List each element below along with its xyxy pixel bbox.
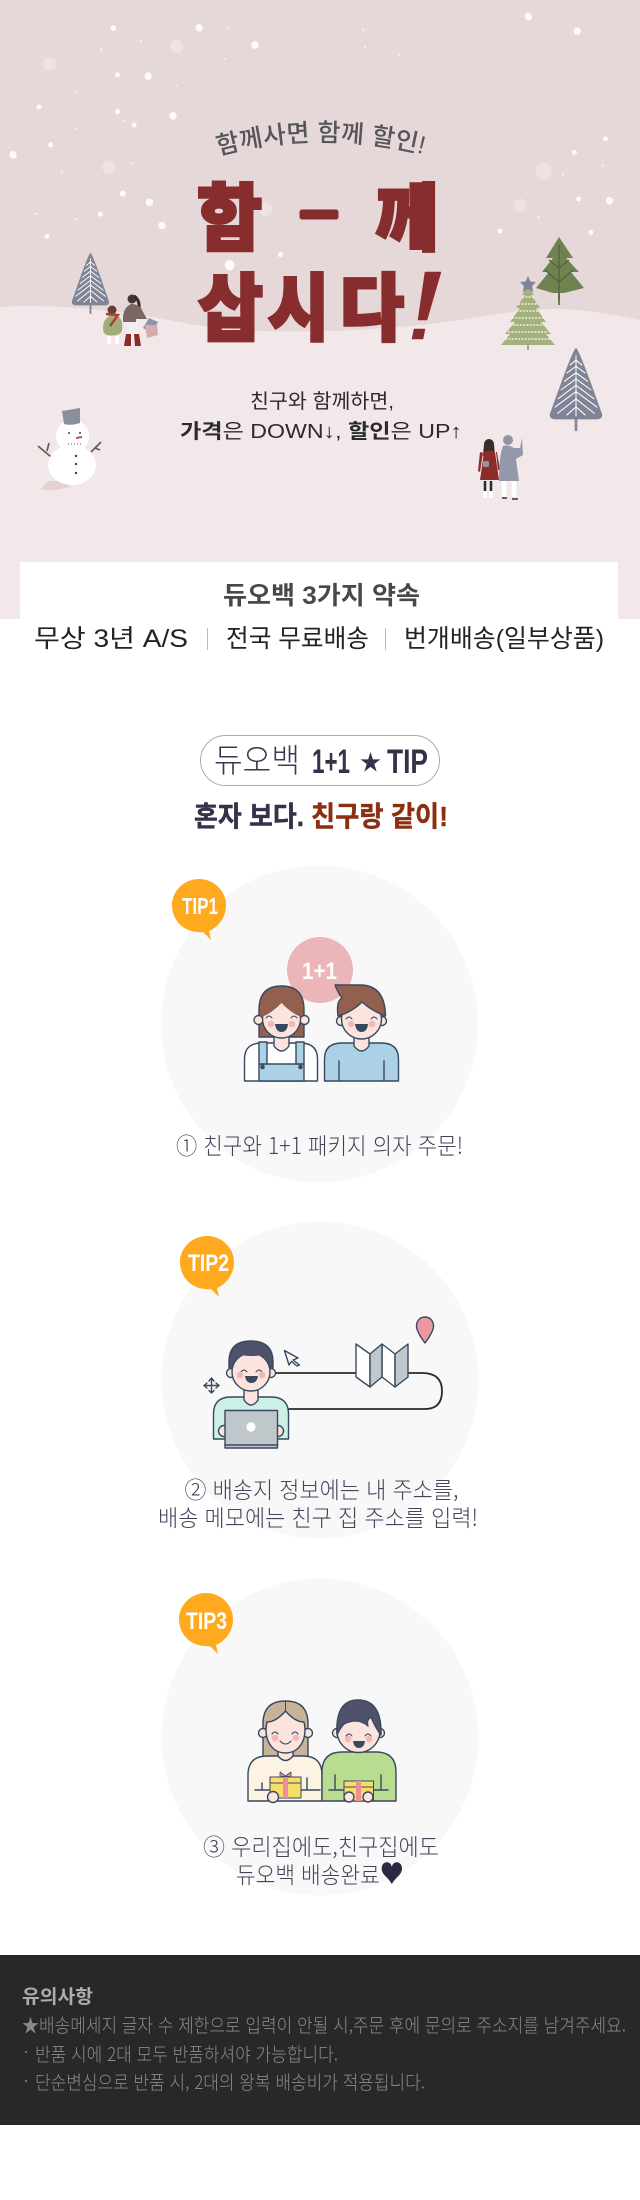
icon: boy with gift — [322, 1700, 396, 1802]
panel: tip 2 — [158, 1222, 478, 1538]
TIP pill heading: 듀오백 — [214, 742, 300, 779]
tip 3 badge: TIP3 — [186, 1608, 227, 1635]
icon: folded map — [356, 1344, 408, 1387]
icon: right grey tree — [550, 348, 602, 431]
panel: tip 1 — [161, 866, 478, 1182]
tip 2 badge: TIP2 — [188, 1250, 229, 1277]
icon: girl with gift — [248, 1701, 322, 1802]
promises row — [34, 625, 604, 653]
tip 2 caption — [158, 1471, 478, 1533]
hero subtitle: 친구와 함께하면, — [250, 390, 394, 413]
notices heading: 유의사항 — [22, 1986, 93, 2008]
panel: notices footer — [0, 1955, 640, 2125]
curved tagline: 함께사면 함께 할인! — [215, 120, 425, 156]
icon: left grey tree — [72, 253, 109, 314]
icon: boy in blue — [324, 985, 398, 1081]
panel: tip 3 — [162, 1578, 478, 1896]
icon: location pin — [416, 1317, 434, 1343]
icon: move arrows — [204, 1378, 219, 1393]
notices list — [22, 2011, 626, 2095]
main title: 삽 — [198, 269, 263, 350]
tip 2 caption: ② 배송지 정보에는 내 주소를, — [184, 1471, 458, 1505]
tip 1 caption: ① 친구와 1+1 패키지 의자 주문! — [176, 1127, 463, 1161]
tip 1 badge — [172, 879, 226, 940]
tip 3 caption — [203, 1828, 439, 1891]
snowflakes — [9, 13, 613, 270]
icon: green pine tree — [536, 237, 584, 305]
TIP pill heading: 1+1 — [312, 743, 350, 781]
main title: 시 — [268, 269, 329, 350]
tip 3 caption: ③ 우리집에도,친구집에도 — [203, 1828, 439, 1862]
notices list: 단순변심으로 반품 시, 2대의 왕복 배송비가 적용됩니다. — [35, 2068, 425, 2095]
TIP pill heading: ★ — [360, 750, 381, 775]
TIP pill heading — [200, 736, 440, 786]
TIP pill heading: TIP — [387, 743, 428, 781]
icon: light green tree with star — [501, 276, 555, 350]
main title — [197, 179, 441, 350]
icon: girl in overalls — [244, 986, 318, 1081]
icon: mother and child shopping — [103, 294, 158, 346]
icon: person with laptop — [214, 1341, 288, 1448]
heading: better with a friend: 친구랑 같이! — [311, 801, 448, 832]
icon: couple from behind — [478, 435, 523, 499]
hero subtitle — [180, 390, 462, 443]
heading: better with a friend: 혼자 보다. — [194, 801, 304, 832]
panel: winter hero background — [0, 0, 640, 619]
promises row: 번개배송(일부상품) — [404, 625, 604, 653]
main title: 께 — [376, 179, 438, 260]
hero subtitle: 가격 은 DOWN↓, 할인 은 UP↑ — [180, 420, 462, 443]
tip 3 badge — [179, 1593, 233, 1654]
promise heading: 듀오백 3가지 약속 — [223, 582, 420, 610]
1+1 bubble: 1+1 — [302, 958, 337, 985]
tip 1 badge: TIP1 — [182, 893, 218, 919]
icon: snowman — [38, 408, 101, 490]
icon: cursor — [284, 1350, 300, 1366]
tip 2 caption: 배송 메모에는 친구 집 주소를 입력! — [158, 1499, 478, 1533]
panel: 3 promises — [20, 562, 618, 619]
tip 3 caption: 듀오백 배송완료♥ — [236, 1854, 404, 1891]
promises row: 무상 3년 A/S — [34, 625, 188, 653]
delivery route line — [275, 1373, 442, 1409]
main title: 함 — [197, 179, 262, 260]
1+1 bubble — [287, 937, 353, 1003]
promises row: 전국 무료배송 — [226, 625, 369, 653]
notices list: 반품 시에 2대 모두 반품하셔야 가능합니다. — [35, 2040, 338, 2067]
heading: better with a friend — [194, 801, 448, 832]
tip 2 badge — [180, 1236, 234, 1297]
main title: 다 — [340, 269, 404, 350]
